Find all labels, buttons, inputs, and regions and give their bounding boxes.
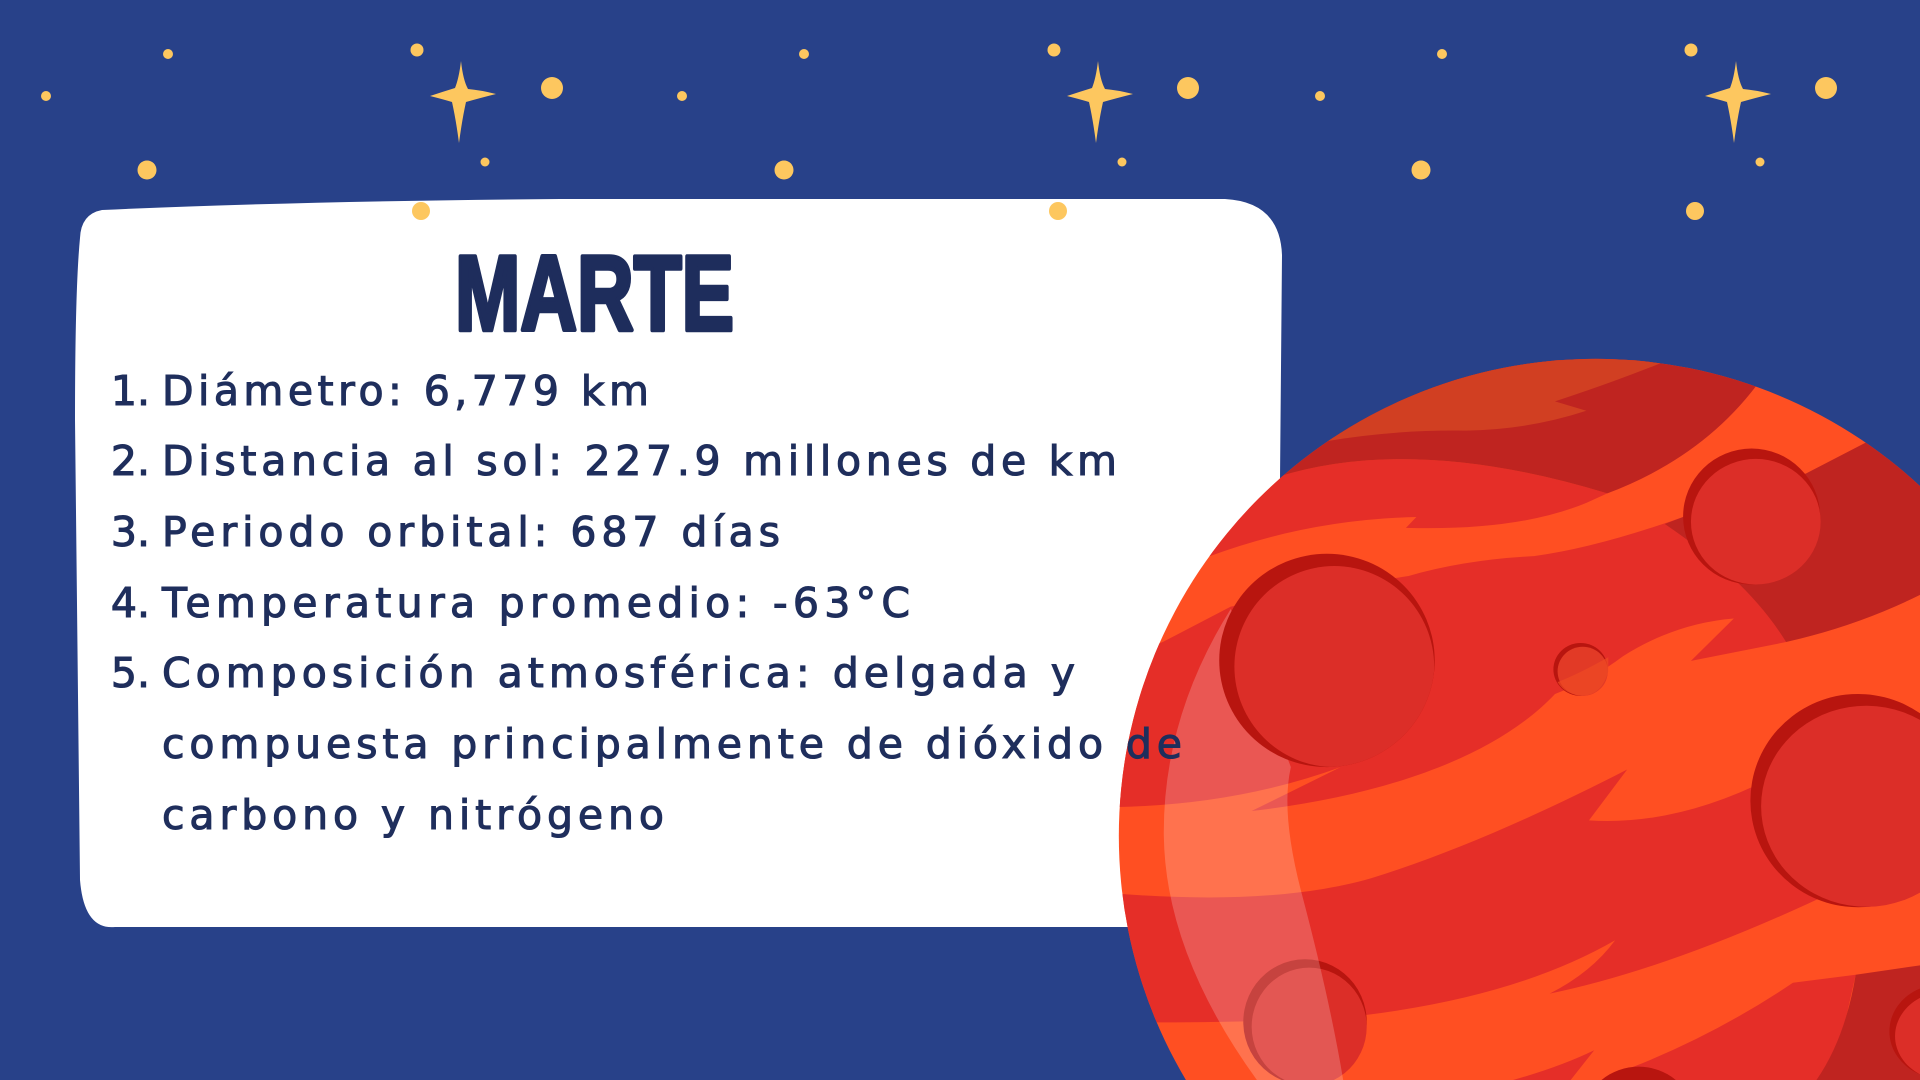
fact 1: Diámetro: 6,779 km (162, 367, 649, 415)
fact 3: 3. (111, 508, 150, 556)
fact 5: Composición atmosférica: delgada y (162, 649, 1075, 697)
fact 5 (111, 649, 1182, 839)
top rust patch (1328, 358, 1660, 441)
panel: white information card (75, 199, 1282, 927)
crater bottom right (1889, 988, 1920, 1074)
crater upper right (1683, 449, 1821, 584)
fact 2: Distancia al sol: 227.9 millones de km (162, 437, 1117, 485)
crater large left (1219, 554, 1435, 767)
numbered facts list (111, 367, 1182, 839)
crater bottom (1602, 1067, 1676, 1080)
title: MARTE (455, 233, 734, 353)
yellow dots over card (412, 202, 1704, 220)
fact 5: carbono y nitrógeno (162, 791, 664, 839)
dark red patches (1257, 340, 1920, 1080)
planet highlight crescent (1164, 609, 1343, 1080)
fact 1: 1. (111, 367, 150, 415)
crater large right (1750, 694, 1920, 907)
crater bottom left (1243, 959, 1367, 1080)
fact 3: Periodo orbital: 687 días (162, 508, 780, 556)
fact 5: 5. (111, 649, 150, 697)
planet Mars (1100, 340, 1920, 1080)
crater small centre (1553, 643, 1608, 696)
fact 5: compuesta principalmente de dióxido de (162, 720, 1182, 768)
fact 4: 4. (111, 579, 150, 627)
starry sky (41, 44, 1837, 180)
fact 2: 2. (111, 437, 150, 485)
fact 4: Temperatura promedio: -63°C (161, 579, 910, 627)
red bands (1100, 459, 1856, 1080)
